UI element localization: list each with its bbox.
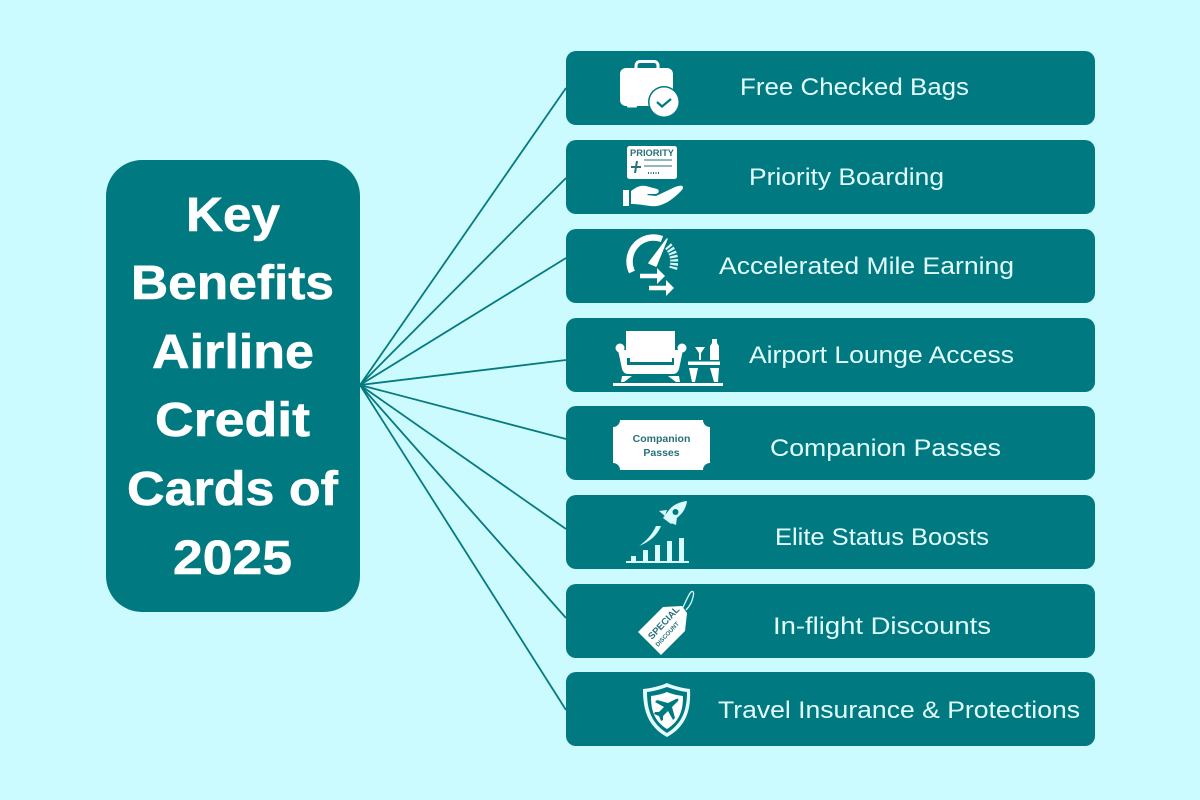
panel: airport lounge access	[566, 318, 1095, 392]
label: Companion Passes	[770, 435, 1001, 462]
panel: elite status boosts	[566, 495, 1095, 569]
label: Airport Lounge Access	[749, 342, 1014, 369]
icon: shield with plane	[643, 683, 690, 737]
icon: suitcase with check	[620, 62, 680, 118]
icon: rocket over bar chart	[626, 501, 689, 563]
icon: speedometer with arrows	[630, 237, 674, 296]
label: Free Checked Bags	[740, 74, 969, 101]
title: 2025	[173, 532, 292, 585]
title	[127, 189, 339, 585]
title: Credit	[155, 394, 310, 447]
label: Accelerated Mile Earning	[719, 253, 1014, 280]
panel: companion passes	[566, 406, 1095, 480]
panel: title	[106, 160, 360, 612]
panel: travel insurance and protections	[566, 672, 1095, 746]
icon: priority card on hand: PRIORITY	[630, 148, 674, 158]
label: In-flight Discounts	[773, 613, 991, 640]
panel: free checked bags	[566, 51, 1095, 125]
title: Benefits	[131, 257, 334, 310]
title: Airline	[152, 326, 314, 379]
icon: priority card on hand	[623, 146, 683, 206]
panel: accelerated mile earning	[566, 229, 1095, 303]
icon: lounge chair and table	[613, 331, 723, 386]
icon: special discount tag	[638, 591, 694, 655]
title: Key	[186, 189, 280, 242]
icon: companion ticket: Passes	[643, 447, 680, 459]
panel: in-flight discounts	[566, 584, 1095, 658]
panel: priority boarding	[566, 140, 1095, 214]
label: Elite Status Boosts	[775, 524, 989, 551]
title: Cards of	[127, 463, 339, 516]
icon: companion ticket: Companion	[633, 433, 690, 445]
label: Travel Insurance & Protections	[718, 697, 1080, 724]
label: Priority Boarding	[749, 164, 944, 191]
icon: special discount tag: SPECIAL	[646, 604, 682, 642]
icon: companion ticket	[613, 420, 710, 470]
connector lines	[360, 88, 566, 710]
icon: special discount tag: DISCOUNT	[655, 621, 681, 648]
